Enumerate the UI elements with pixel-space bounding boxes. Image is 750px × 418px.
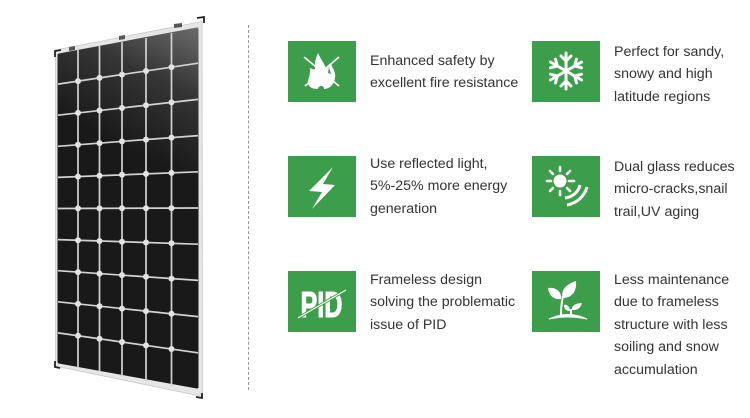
text: low maintenance: accumulation [614, 362, 698, 378]
text: sandy and snowy regions: Perfect for sandy, [614, 44, 724, 60]
text: low maintenance: due to frameless [614, 294, 719, 310]
text: sandy and snowy regions [614, 44, 724, 105]
panel: reflected light [288, 156, 508, 217]
solar panel illustration [54, 16, 205, 399]
icon: crossed-out flame [288, 41, 356, 102]
text: frameless PID: issue of PID [370, 317, 446, 333]
panel: dual glass [532, 156, 735, 220]
text: reflected light [370, 156, 508, 217]
text: frameless PID: solving the problematic [370, 294, 515, 310]
panel: sandy and snowy regions [532, 41, 724, 105]
icon: sprout [532, 271, 600, 332]
icon: lightning bolt [288, 156, 356, 217]
text: low maintenance: structure with less [614, 317, 728, 333]
text: dual glass: Dual glass reduces [614, 159, 735, 175]
icon: snowflake [532, 41, 600, 102]
text: reflected light: Use reflected light, [370, 156, 488, 172]
panel: fire resistance [288, 41, 518, 102]
text: sandy and snowy regions: snowy and high [614, 66, 713, 82]
text: frameless PID: Frameless design [370, 272, 482, 288]
panel: frameless PID [288, 271, 515, 333]
panel: low maintenance [532, 271, 729, 378]
text: reflected light: generation [370, 201, 437, 217]
text: low maintenance: soiling and snow [614, 339, 719, 355]
text: dual glass [614, 159, 735, 220]
dashed divider [248, 25, 249, 390]
text: dual glass: trail,UV aging [614, 204, 699, 220]
text: dual glass: micro-cracks,snail [614, 181, 728, 197]
text: frameless PID [370, 272, 515, 333]
text: fire resistance [370, 53, 518, 91]
text: sandy and snowy regions: latitude regions [614, 89, 710, 105]
icon: PID struck through [288, 271, 356, 332]
text: low maintenance [614, 272, 729, 378]
text: fire resistance: Enhanced safety by [370, 53, 495, 69]
text: reflected light: 5%-25% more energy [370, 178, 507, 194]
text: fire resistance: excellent fire resistance [370, 75, 518, 91]
icon: sun with UV waves [532, 156, 600, 217]
text: low maintenance: Less maintenance [614, 272, 729, 288]
